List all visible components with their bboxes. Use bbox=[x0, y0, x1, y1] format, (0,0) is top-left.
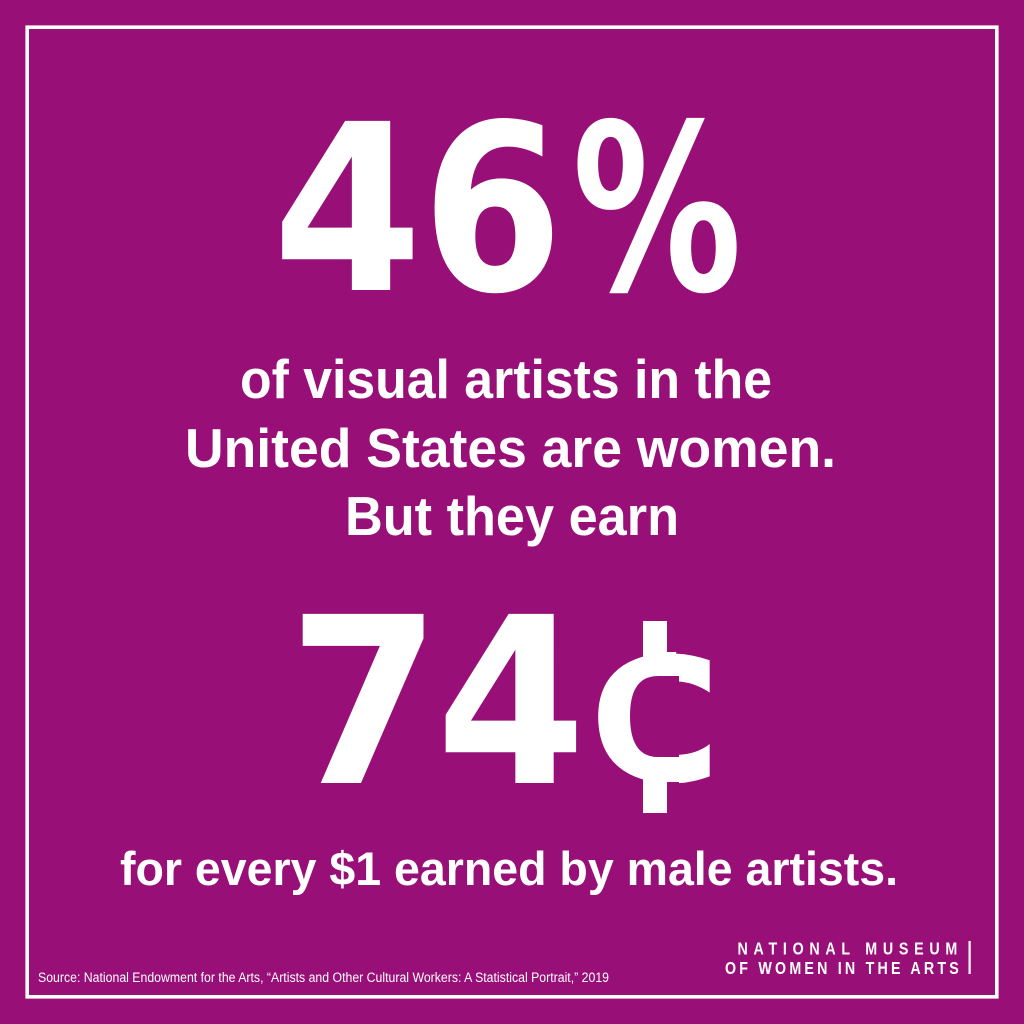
headline stat: 46%: 6 bbox=[422, 75, 563, 345]
pay stat: 74 cents: 4 bbox=[436, 568, 586, 838]
comparison line: for every $1 earned by male artists. bbox=[120, 842, 898, 895]
headline stat: 46%: 4 bbox=[272, 75, 422, 345]
statement text: of visual artists in the bbox=[240, 348, 772, 410]
pay stat: 74 cents: 7 bbox=[288, 568, 441, 838]
logo: National Museum of Women in the Arts: OF WOMEN IN THE ARTS bbox=[725, 960, 962, 978]
pay stat: 74 cents: ¢ bbox=[578, 571, 740, 834]
pay stat: 74 cents bbox=[288, 568, 740, 838]
logo: National Museum of Women in the Arts: NATIONAL MUSEUM bbox=[738, 940, 963, 959]
statement text bbox=[185, 348, 836, 547]
headline stat: 46%: % bbox=[572, 75, 742, 345]
headline stat: 46% bbox=[272, 75, 742, 345]
statement text: United States are women. bbox=[185, 417, 836, 479]
source note: Source: National Endowment for the Arts, “Artists and Other Cultural Workers: A Statistical Portrait,” 2019 bbox=[38, 970, 609, 985]
statement text: But they earn bbox=[345, 485, 679, 547]
logo: National Museum of Women in the Arts bbox=[725, 940, 971, 978]
